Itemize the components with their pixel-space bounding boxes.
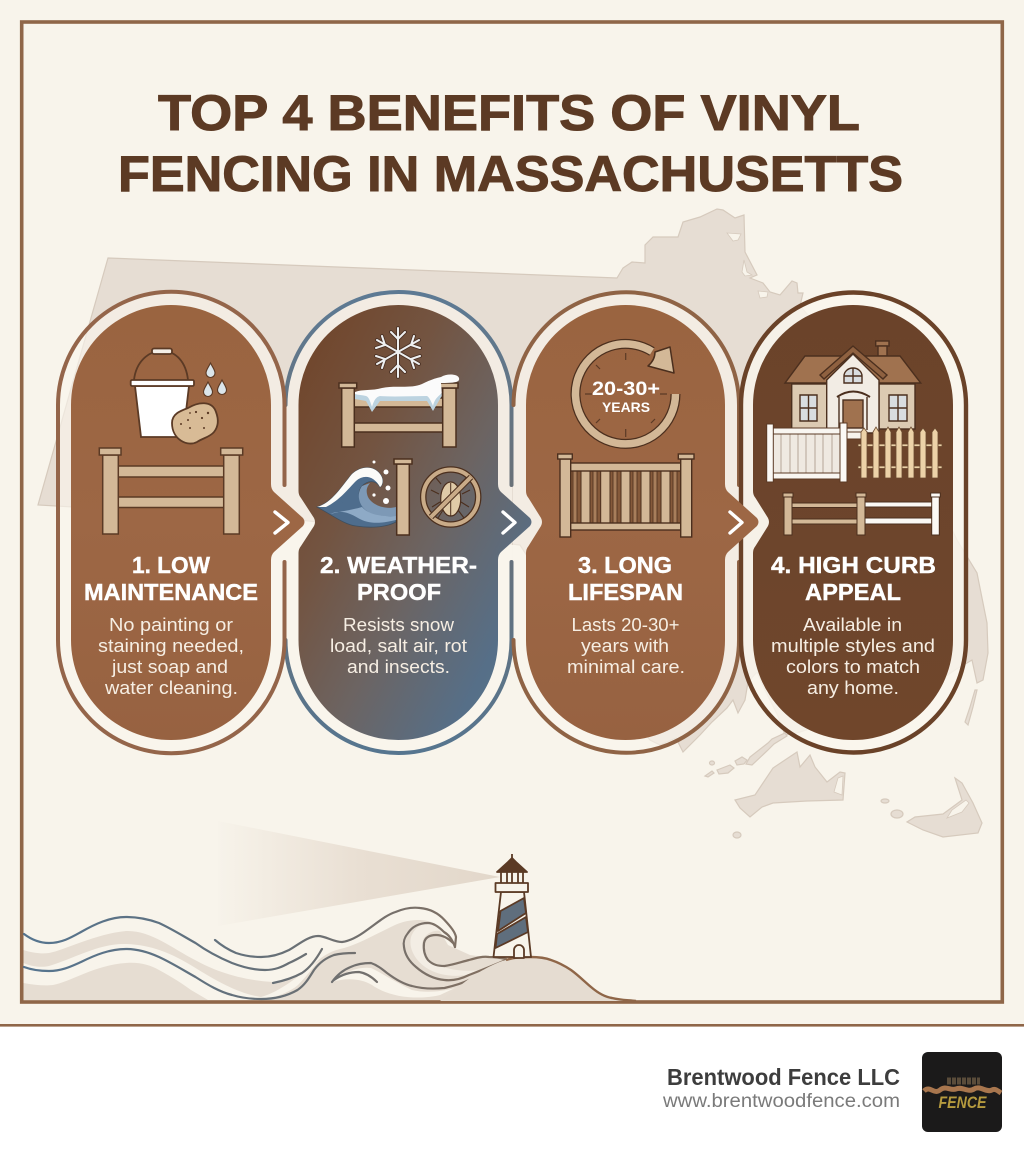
icon: picket panel fence <box>558 454 694 537</box>
description: load, salt air, rot <box>330 636 467 656</box>
title: TOP 4 BENEFITS OF VINYL <box>158 85 860 141</box>
panel: high curb appeal <box>753 305 953 740</box>
heading: MAINTENANCE <box>84 579 258 605</box>
heading <box>320 552 477 605</box>
description: and insects. <box>347 657 450 677</box>
pill 2 shape <box>298 305 532 740</box>
pill bands <box>58 292 967 752</box>
icon: two-rail fence <box>99 448 243 534</box>
lighthouse beam <box>218 821 500 926</box>
map lagoons <box>727 233 969 818</box>
description <box>98 615 244 698</box>
icon: water drops <box>204 363 226 396</box>
clock label: YEARS <box>602 399 650 415</box>
description: No painting or <box>109 615 233 635</box>
description <box>330 615 467 677</box>
logo <box>922 1052 1002 1132</box>
title <box>118 85 903 202</box>
description: just soap and <box>111 657 228 677</box>
icon: single post <box>394 459 412 535</box>
lighthouse <box>494 854 531 958</box>
pill 2 outline <box>286 292 512 753</box>
icon: chevron arrow <box>503 512 515 533</box>
icon: chevron arrow <box>275 512 288 533</box>
panel: low maintenance <box>71 305 304 740</box>
map: Massachusetts <box>38 209 988 838</box>
icon: sponge <box>172 403 218 444</box>
heading: 3. LONG <box>578 552 672 578</box>
description <box>567 615 685 677</box>
icon: house <box>785 341 921 433</box>
description: minimal care. <box>567 657 685 677</box>
brand name: Brentwood Fence LLC <box>667 1064 900 1090</box>
heading: APPEAL <box>805 579 901 605</box>
description: staining needed, <box>98 636 244 656</box>
pill 1 outline <box>58 292 284 753</box>
icon: wave <box>317 460 396 527</box>
clock label: 20-30+ <box>592 379 660 400</box>
logo: FENCE <box>938 1093 987 1112</box>
title: FENCING IN MASSACHUSETTS <box>118 146 903 202</box>
panel: long lifespan <box>526 305 758 740</box>
description: multiple styles and <box>771 636 935 656</box>
heading: 4. HIGH CURB <box>771 552 936 578</box>
icon: picket fence <box>858 427 942 478</box>
icon: chevron arrow <box>730 512 742 533</box>
footer <box>0 1024 1024 1154</box>
description <box>771 615 935 698</box>
pill 4 outline <box>741 293 966 752</box>
heading <box>568 552 683 605</box>
icon: white privacy fence <box>767 423 867 482</box>
icon: circular arrow clock <box>576 344 676 444</box>
hill <box>440 957 632 1001</box>
description: colors to match <box>786 657 920 677</box>
description: water cleaning. <box>104 678 238 698</box>
icon: two-tone rail fence <box>783 493 940 535</box>
pill 3 outline <box>514 292 739 753</box>
pill 1 shape <box>71 305 304 740</box>
heading: 2. WEATHER- <box>320 552 477 578</box>
description: years with <box>581 636 669 656</box>
description: Lasts 20-30+ <box>572 615 680 635</box>
heading: LIFESPAN <box>568 579 683 605</box>
heading <box>771 552 936 605</box>
panel: weather-proof <box>298 305 532 740</box>
pill 3 shape <box>526 305 758 740</box>
icon: no insects <box>423 470 478 524</box>
heading <box>84 552 258 605</box>
heading: 1. LOW <box>132 552 210 578</box>
icon: snow-covered fence <box>339 374 459 447</box>
icon: bucket <box>131 348 194 437</box>
description: Available in <box>803 615 902 635</box>
coastal waves <box>24 908 612 1000</box>
icon: snowflake <box>376 328 420 377</box>
heading: PROOF <box>357 579 441 605</box>
website: www.brentwoodfence.com <box>662 1091 900 1112</box>
description: any home. <box>807 678 899 698</box>
description: Resists snow <box>343 615 455 635</box>
pill 4 shape <box>753 305 953 740</box>
clock label <box>592 379 660 415</box>
